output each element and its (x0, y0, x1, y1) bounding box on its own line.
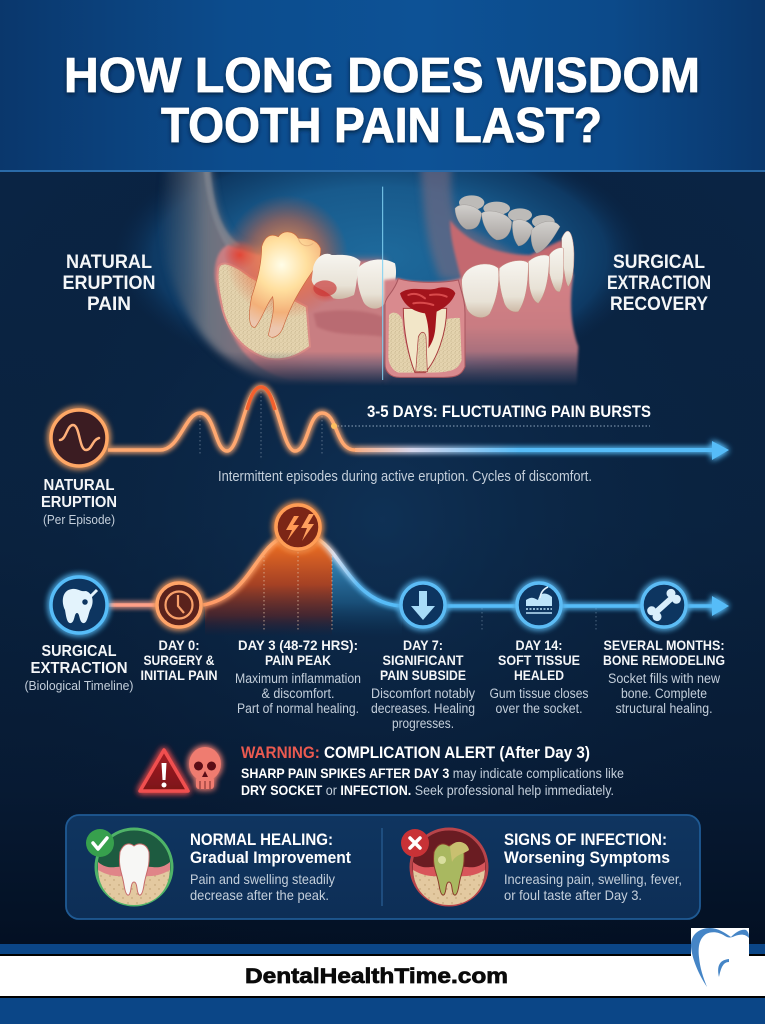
day 14: SOFT TISSUE (498, 652, 580, 668)
day 3: Part of normal healing. (237, 701, 359, 716)
title: HOW LONG DOES WISDOM (64, 49, 700, 103)
signs of infection text: SIGNS OF INFECTION: (504, 831, 667, 849)
icon: down arrow (401, 583, 445, 627)
erupting wisdom tooth (225, 195, 348, 337)
dotted callout line (334, 425, 650, 427)
day 3: PAIN PEAK (265, 652, 331, 668)
normal healing text (190, 831, 351, 903)
day 7: Discomfort notably (371, 686, 475, 701)
divider line (381, 187, 384, 380)
warning text: SHARP PAIN SPIKES AFTER DAY 3 may indicate complications like (241, 765, 624, 781)
surgical extraction label: SURGICAL (42, 643, 117, 660)
several months: structural healing. (616, 701, 712, 716)
day 7: decreases. Healing (371, 701, 475, 716)
normal healing text: decrease after the peak. (190, 887, 329, 903)
label: surgical extraction recovery: RECOVERY (610, 294, 708, 315)
header banner (0, 0, 765, 172)
day 3: DAY 3 (48-72 HRS): (238, 637, 358, 653)
day 3: Maximum inflammation (235, 671, 361, 686)
icon: bone (642, 583, 686, 627)
day 3: & discomfort. (262, 686, 334, 701)
fluctuating pain heading: 3-5 DAYS: FLUCTUATING PAIN BURSTS (367, 402, 651, 421)
several months (603, 637, 725, 716)
jaw illustration (130, 172, 630, 384)
several months: Socket fills with new (608, 671, 720, 686)
warning text: DRY SOCKET or INFECTION. Seek professional help immediately. (241, 782, 614, 798)
day 0: DAY 0: (158, 637, 200, 653)
label: natural eruption pain: PAIN (87, 294, 131, 315)
natural eruption label: (Per Episode) (43, 512, 115, 527)
day 7 (371, 637, 475, 731)
icon: skull (189, 747, 221, 789)
background glow (0, 172, 765, 944)
arrow head (712, 596, 729, 616)
day 14: over the socket. (496, 701, 582, 716)
footer (0, 928, 765, 1024)
surgical extraction timeline (24, 505, 729, 731)
adjacent molars left (312, 254, 396, 309)
right jaw: surgical extraction (384, 160, 578, 387)
curve line (203, 533, 714, 606)
several months: bone. Complete (621, 686, 707, 701)
warning heading: WARNING: COMPLICATION ALERT (After Day 3) (241, 744, 590, 762)
website name: DentalHealthTime.com (245, 965, 508, 988)
label: surgical extraction recovery: SURGICAL (613, 252, 705, 273)
normal healing text: Gradual Improvement (190, 849, 351, 867)
day 0 (140, 637, 218, 683)
signs of infection text (504, 831, 682, 903)
icon: green check badge (86, 829, 114, 857)
surgical extraction label (24, 643, 134, 693)
title (64, 49, 700, 153)
day 0: SURGERY & (144, 652, 214, 668)
signs of infection text: Worsening Symptoms (504, 849, 670, 867)
several months: SEVERAL MONTHS: (604, 637, 724, 653)
page background (0, 172, 765, 944)
label: surgical extraction recovery (607, 252, 711, 315)
icon: surgical tooth (51, 577, 107, 633)
icon: healthy tooth (96, 829, 172, 905)
panel: healing comparison (66, 815, 700, 919)
recovery area fill (332, 552, 402, 636)
surgical extraction label: EXTRACTION (30, 660, 128, 677)
day 7: DAY 7: (403, 637, 443, 653)
icon: lightning peak (276, 505, 320, 549)
day 7: progresses. (392, 716, 454, 731)
warning alert (140, 744, 624, 798)
several months: BONE REMODELING (603, 652, 725, 668)
icon: warning triangle (140, 750, 188, 791)
extraction socket (385, 279, 465, 377)
day 7: PAIN SUBSIDE (380, 667, 466, 683)
icon: wave circle (51, 410, 107, 466)
day 14: DAY 14: (516, 637, 562, 653)
icon: infected tooth (411, 829, 487, 905)
title: TOOTH PAIN LAST? (161, 99, 602, 153)
day 14: Gum tissue closes (490, 686, 589, 701)
upper back teeth (455, 195, 560, 253)
signs of infection text: Increasing pain, swelling, fever, (504, 871, 682, 887)
natural eruption label (41, 477, 117, 527)
surgical extraction label: (Biological Timeline) (24, 678, 134, 693)
left jaw: natural eruption (162, 160, 385, 387)
day 3 (235, 637, 361, 716)
description: Intermittent episodes during active eruption. Cycles of discomfort. (218, 469, 592, 485)
natural eruption timeline (41, 387, 729, 527)
label: natural eruption pain: ERUPTION (62, 273, 156, 294)
day 14: HEALED (514, 667, 564, 683)
normal healing text: NORMAL HEALING: (190, 831, 333, 849)
icon: red x badge (401, 829, 429, 857)
label: natural eruption pain (62, 252, 156, 315)
peak area fill (205, 533, 332, 636)
lower front teeth (462, 231, 574, 318)
bone cross-section (218, 264, 310, 359)
day 7: SIGNIFICANT (382, 652, 464, 668)
pain wave line (355, 448, 714, 452)
natural eruption label: NATURAL (44, 477, 115, 494)
normal healing text: Pain and swelling steadily (190, 871, 335, 887)
day 14 (490, 637, 589, 716)
day 0: INITIAL PAIN (140, 667, 218, 683)
logo: tooth (691, 928, 749, 987)
signs of infection text: or foul taste after Day 3. (504, 887, 642, 903)
arrow head (712, 441, 729, 460)
label: natural eruption pain: NATURAL (66, 252, 152, 273)
icon: clock (157, 583, 201, 627)
natural eruption label: ERUPTION (41, 494, 117, 511)
icon: tissue (517, 583, 561, 627)
label: surgical extraction recovery: EXTRACTION (607, 273, 711, 294)
warning text (241, 765, 624, 798)
